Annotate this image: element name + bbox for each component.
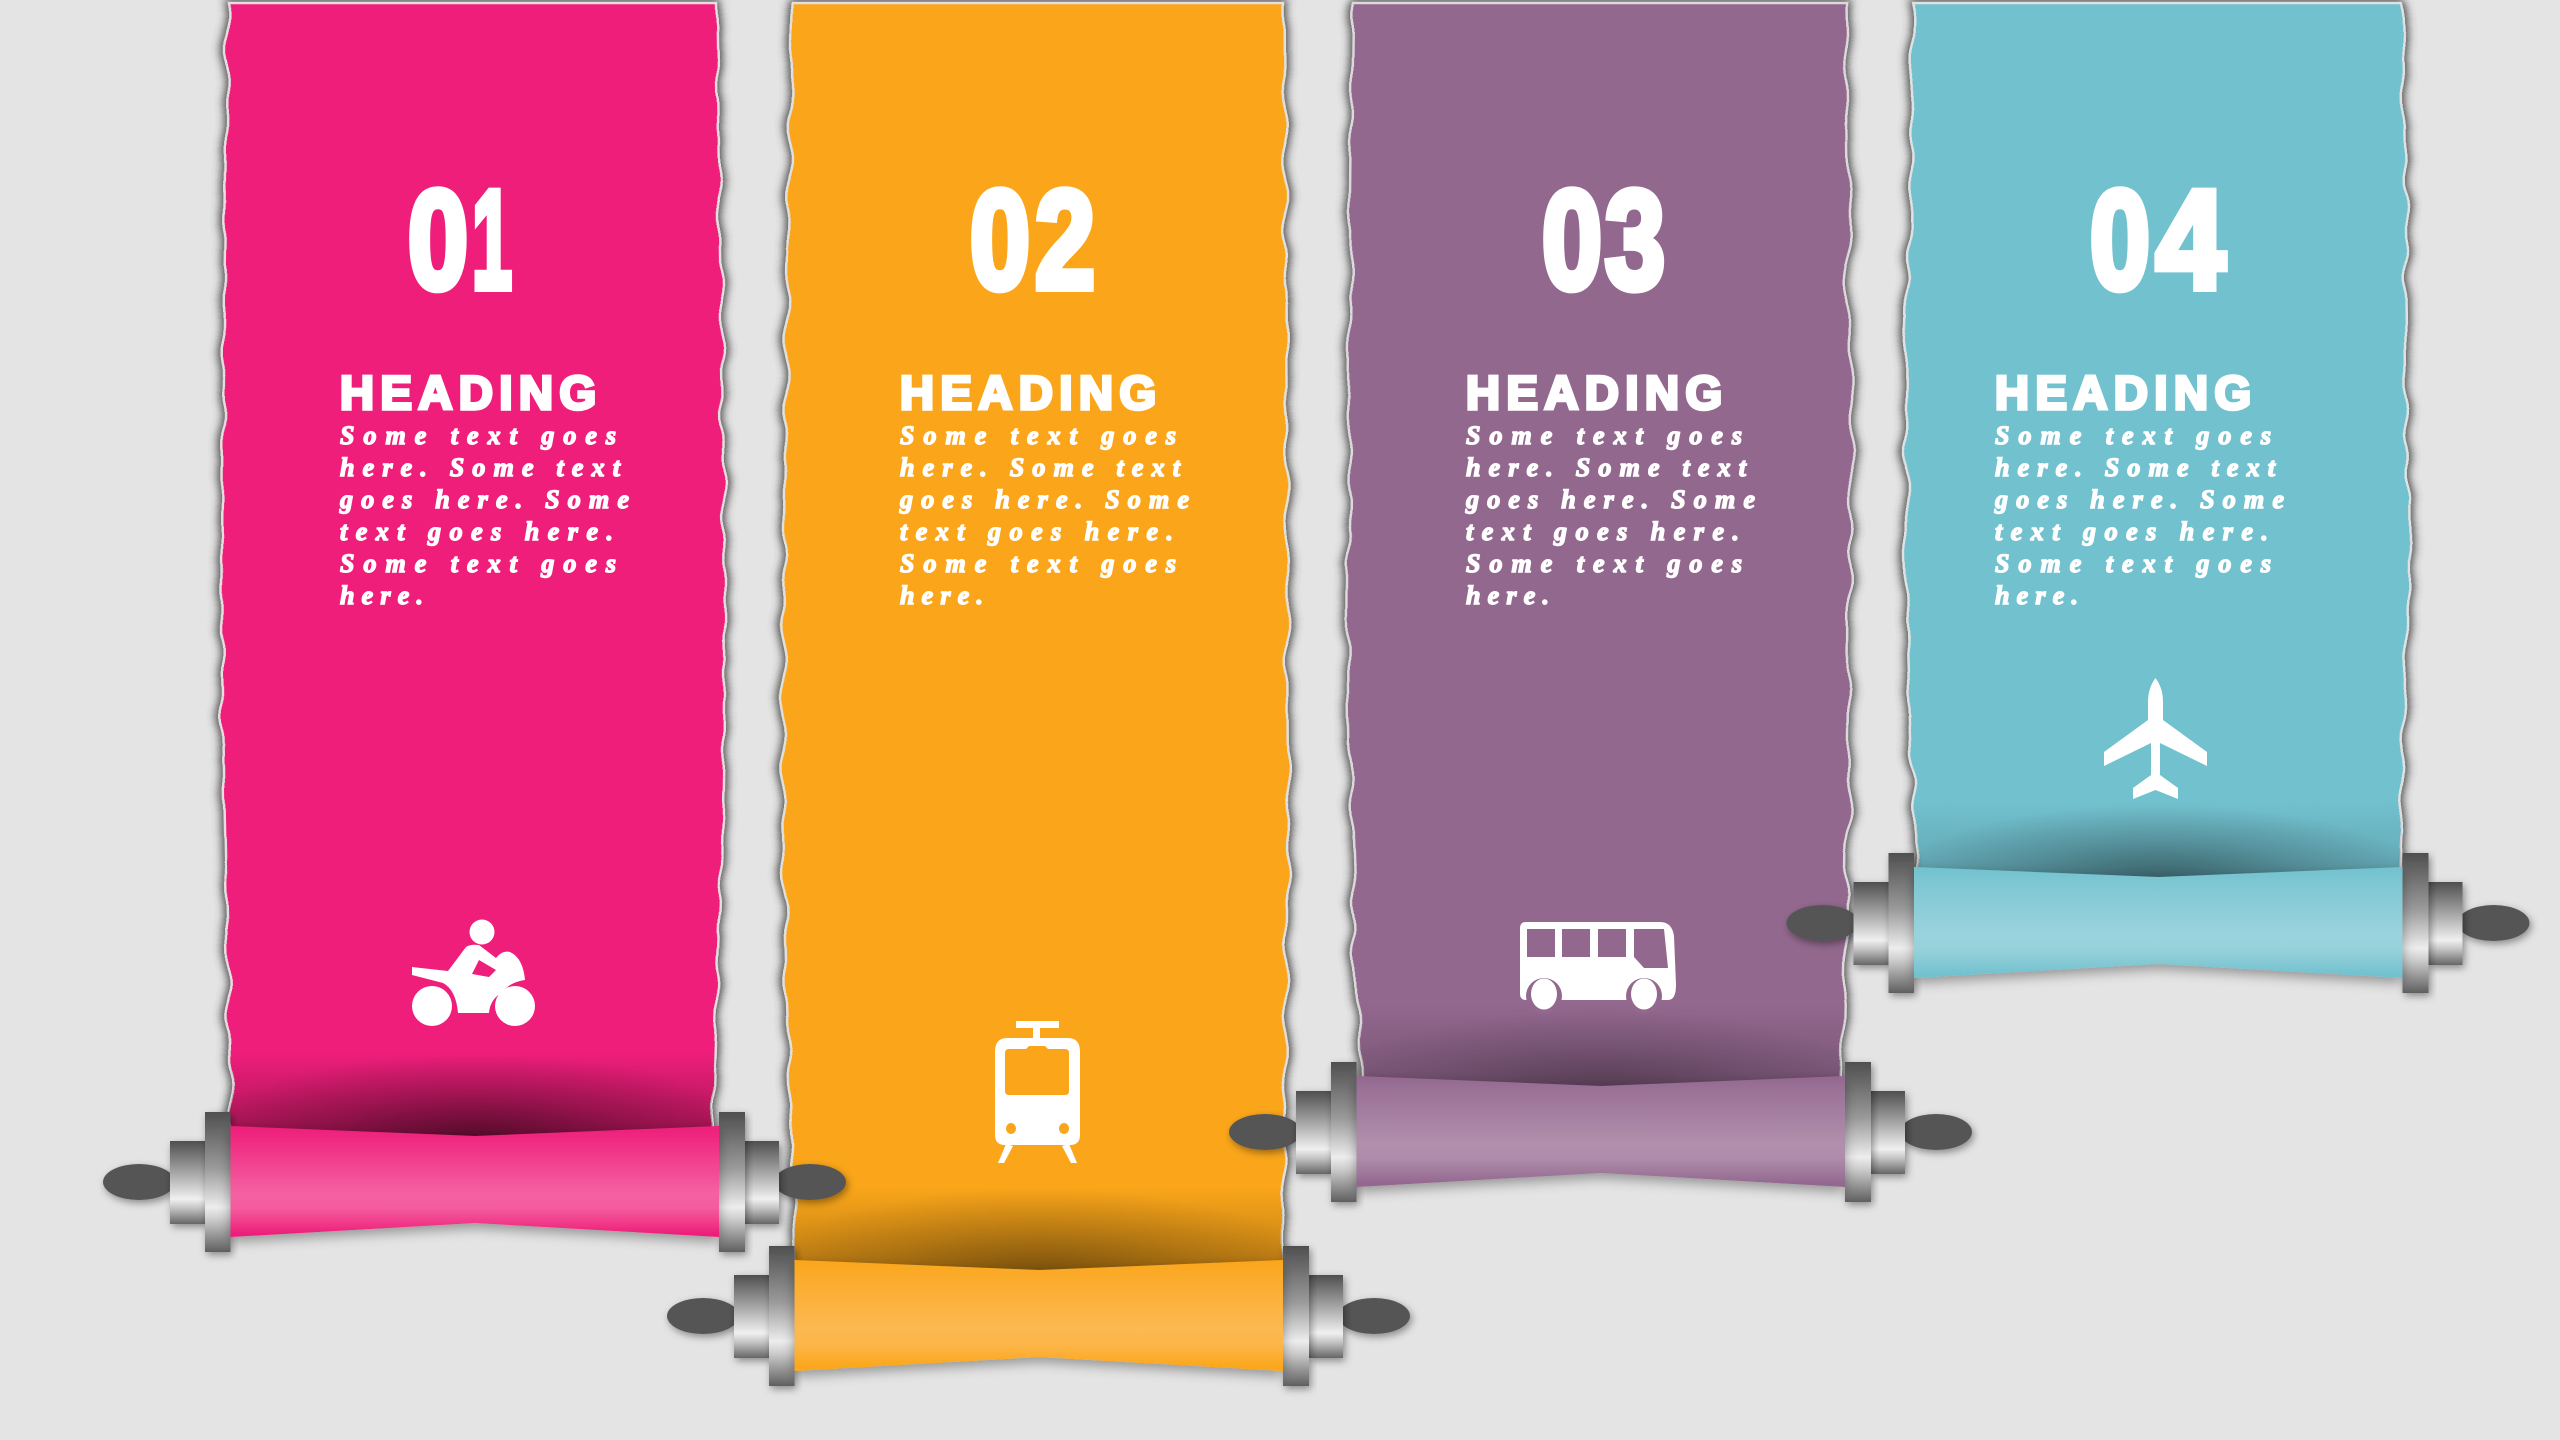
number 01: 0 [408, 161, 468, 318]
body text 01: here. [340, 581, 423, 610]
number 03: 0 [1542, 161, 1602, 318]
body text 01: text goes here. [340, 517, 613, 546]
body text 03: Some text goes [1466, 549, 1742, 578]
body text 04: Some text goes [1995, 421, 2271, 450]
number 01: 1 [472, 161, 512, 318]
number 02: 2 [1035, 161, 1095, 318]
body text 03: Some text goes [1466, 421, 1742, 450]
roller 03 [1229, 1062, 1972, 1202]
icon: airplane [2104, 678, 2207, 799]
heading 02: HEADING [900, 366, 1156, 419]
body text 03 [1465, 421, 1755, 610]
panel: 04 teal plane [1786, 3, 2530, 993]
number 04: 0 [2090, 161, 2150, 318]
number 04: 4 [2156, 161, 2225, 318]
body text 02: Some text goes [900, 549, 1176, 578]
body text 04: text goes here. [1995, 517, 2268, 546]
panel: 01 pink motorbike [103, 3, 846, 1252]
body text 02: text goes here. [900, 517, 1173, 546]
body text 02: here. [900, 581, 983, 610]
body text 02: here. Some text [900, 453, 1181, 482]
panel: 02 orange tram [667, 3, 1410, 1386]
torn paper strip 03 [1335, 0, 1866, 1086]
body text 04: Some text goes [1995, 549, 2271, 578]
body text 01: Some text goes [340, 549, 616, 578]
body text 01 [339, 421, 629, 610]
body text 01: Some text goes [340, 421, 616, 450]
number 03: 3 [1605, 161, 1665, 318]
icon: tram [995, 1021, 1080, 1163]
body text 01: goes here. Some [339, 485, 629, 514]
torn paper strip 01 [208, 0, 737, 1136]
panel: 03 purple bus [1229, 3, 1972, 1202]
body text 02: goes here. Some [899, 485, 1189, 514]
body text 04 [1994, 421, 2284, 610]
body text 03: here. Some text [1466, 453, 1747, 482]
body text 03: goes here. Some [1465, 485, 1755, 514]
roller 02 [667, 1246, 1410, 1386]
number 03 [1542, 161, 1665, 318]
number 02 [970, 161, 1095, 318]
torn paper strip 04 [1888, 3, 2428, 957]
heading 04: HEADING [1995, 366, 2251, 419]
body text 02: Some text goes [900, 421, 1176, 450]
body text 02 [899, 421, 1189, 610]
icon: motorbike [412, 920, 535, 1026]
roller 01 [103, 1112, 846, 1252]
body text 04: goes here. Some [1994, 485, 2284, 514]
number 02: 0 [970, 161, 1030, 318]
body text 01: here. Some text [340, 453, 621, 482]
body text 04: here. [1995, 581, 2078, 610]
body text 04: here. Some text [1995, 453, 2276, 482]
torn paper strip 02 [768, 0, 1302, 1270]
body text 03: here. [1466, 581, 1549, 610]
heading 01: HEADING [340, 366, 596, 419]
heading 03: HEADING [1466, 366, 1722, 419]
number 04 [2090, 161, 2225, 318]
icon: bus [1520, 922, 1676, 1014]
roller 04 [1786, 853, 2530, 993]
body text 03: text goes here. [1466, 517, 1739, 546]
